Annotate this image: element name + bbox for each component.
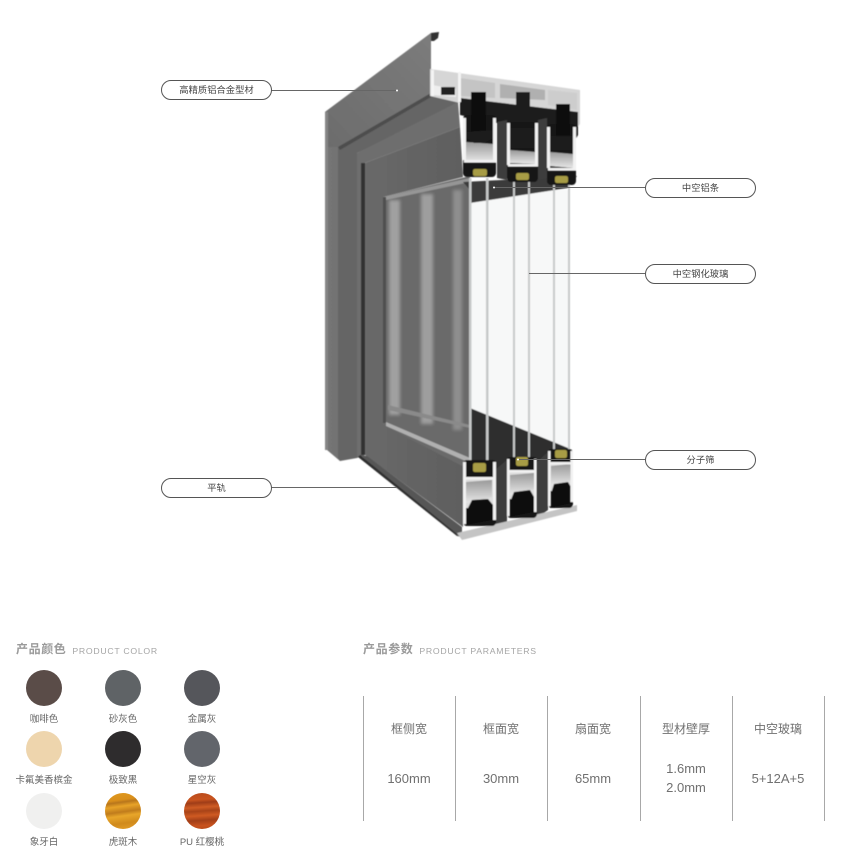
label: spacer bar: 中空铝条 (682, 183, 719, 193)
heading: product color: 产品颜色 PRODUCT COLOR (16, 642, 158, 656)
caption: ivory: 象牙白 (30, 837, 58, 848)
swatch: jet black (105, 731, 141, 767)
top glass bar (463, 176, 577, 203)
column 2 value: 30mm (483, 771, 519, 786)
bottom sash profile 2 (507, 457, 537, 518)
heading: product parameters: 产品参数 PRODUCT PARAMETERS (363, 642, 537, 656)
column 2 heading: 框面宽 (483, 722, 519, 736)
swatch: coffee (26, 670, 62, 706)
label: aluminium profile (161, 80, 272, 100)
column 5 heading: 中空玻璃 (754, 722, 802, 736)
column 4 value: 2.0mm (666, 780, 706, 795)
label: tempered glass: 中空钢化玻璃 (673, 269, 728, 279)
label: flat rail (161, 478, 272, 498)
swatch: champagne gold (26, 731, 62, 767)
column 1 heading: 框侧宽 (391, 722, 427, 736)
caption: sand grey: 砂灰色 (109, 714, 137, 725)
top sash profile 3 (547, 104, 576, 185)
table: parameters (363, 696, 825, 821)
pane edges (469, 178, 570, 470)
caption: champagne gold: 卡氟美香槟金 (15, 775, 72, 786)
label: flat rail: 平轨 (207, 483, 226, 493)
caption: metal grey: 金属灰 (188, 714, 216, 725)
sash face (358, 127, 463, 537)
caption: star grey: 星空灰 (188, 775, 216, 786)
swatch: metal grey (184, 670, 220, 706)
top track profile (430, 69, 580, 140)
column 3 heading: 扇面宽 (575, 722, 611, 736)
caption: jet black: 极致黑 (109, 775, 137, 786)
outer frame (325, 32, 460, 461)
center mullions (497, 120, 507, 180)
caption: red cherry: PU 红樱桃 (180, 837, 224, 848)
column 4 value: 1.6mm (666, 761, 706, 776)
caption: coffee: 咖啡色 (30, 714, 58, 725)
bottom glass bar (470, 408, 572, 470)
column 4 value (666, 761, 706, 795)
leader dots (396, 90, 519, 460)
bottom track (457, 505, 577, 540)
panel: color swatches (15, 670, 224, 848)
column 3 value: 65mm (575, 771, 611, 786)
glass panes (383, 176, 568, 470)
bottom sash profile 3 (548, 449, 573, 508)
column 5 value: 5+12A+5 (752, 771, 804, 786)
label: tempered glass (645, 264, 756, 284)
top sash profile 1 (463, 92, 496, 177)
swatch: red cherry (184, 793, 220, 829)
caption: tiger wood: 虎斑木 (109, 837, 137, 848)
column 1 value: 160mm (387, 771, 431, 786)
swatch: tiger wood (105, 793, 141, 829)
label: aluminium profile: 高精质铝合金型材 (179, 85, 254, 95)
column 4 heading: 型材壁厚 (662, 722, 710, 736)
leader lines (271, 90, 645, 488)
label: spacer bar (645, 178, 756, 198)
label: molecular sieve: 分子筛 (687, 455, 714, 465)
swatch: ivory (26, 793, 62, 829)
swatch: sand grey (105, 670, 141, 706)
bottom sash profile 1 (463, 460, 496, 526)
swatch: star grey (184, 731, 220, 767)
label: molecular sieve (645, 450, 756, 470)
product cross-section illustration (272, 31, 645, 540)
top sash profile 2 (507, 92, 538, 182)
